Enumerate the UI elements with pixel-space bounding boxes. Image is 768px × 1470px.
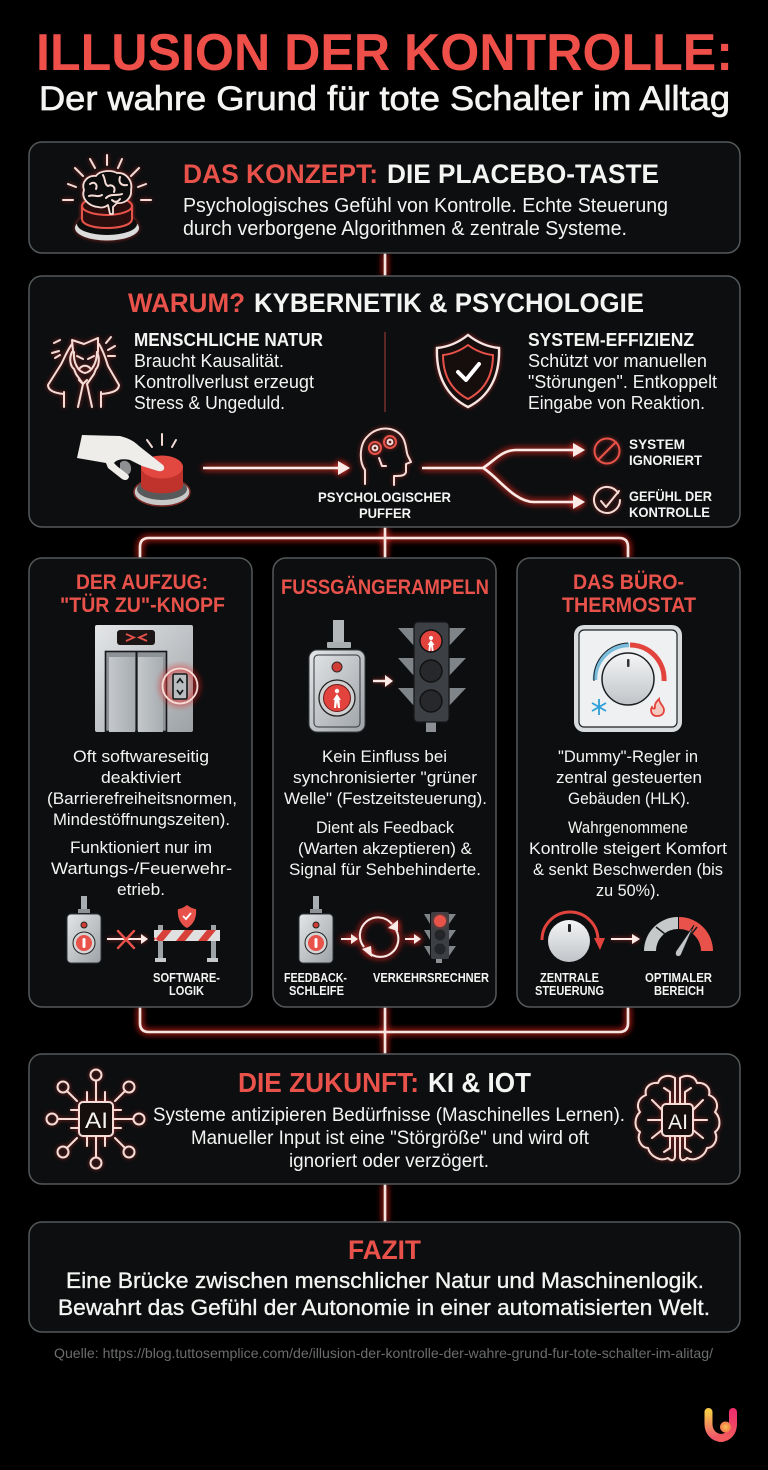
text: conclusion: Bewahrt das Gefühl der Autonomie in einer automatisierten Welt.	[58, 1295, 710, 1320]
text: future	[153, 1105, 625, 1172]
text: thermostat: Gebäuden (HLK).	[568, 789, 690, 808]
text: system efficiency: SYSTEM-EFFIZIENZ	[528, 330, 694, 350]
label: software logic: SOFTWARE-	[153, 971, 220, 985]
panel: concept	[29, 142, 740, 253]
title: Der wahre Grund für tote Schalter im Alltag	[39, 80, 730, 118]
text: human nature	[134, 330, 323, 413]
text: thermostat: zentral gesteuerten	[556, 768, 702, 787]
text: elevator	[47, 747, 237, 899]
icon: AI chip network	[46, 1070, 144, 1168]
icon: barrier with shield	[154, 905, 220, 962]
icon: mini traffic light	[424, 912, 456, 963]
icon: brain on button	[63, 155, 151, 240]
text: pedestrian lights	[284, 747, 487, 879]
text: thermostat: Wahrgenommene	[568, 818, 688, 837]
text: elevator: Wartungs-/Feuerwehr-	[51, 859, 232, 878]
icon: traffic light	[398, 622, 466, 732]
icon: gauge	[644, 917, 713, 956]
text: human nature: Kontrollverlust erzeugt	[134, 372, 314, 392]
title: ILLUSION DER KONTROLLE:	[36, 24, 733, 82]
arrow: button to light	[373, 675, 393, 687]
heading: conclusion: FAZIT	[348, 1235, 421, 1265]
label: optimal range: OPTIMALER	[645, 971, 712, 985]
arrow: blocked	[107, 931, 148, 948]
text: future: Systeme antizipieren Bedürfnisse (Maschinelles Lernen).	[153, 1105, 625, 1126]
heading: concept	[183, 159, 659, 189]
label: feeling of control: GEFÜHL DER	[629, 488, 712, 504]
icon: stressed person	[48, 337, 119, 407]
label: system ignores: SYSTEM	[629, 436, 685, 452]
heading: thermostat: THERMOSTAT	[562, 594, 696, 617]
icon: mini push button	[299, 896, 333, 963]
icon: check circle	[594, 487, 620, 513]
icon: thermostat dial	[574, 625, 682, 732]
panel: future	[29, 1054, 740, 1184]
connectors	[140, 254, 628, 1222]
label: feeling of control: KONTROLLE	[629, 504, 710, 520]
text: thermostat	[529, 747, 727, 900]
heading: concept: DIE PLACEBO-TASTE	[387, 159, 659, 189]
panel: elevator	[29, 558, 252, 1007]
logo	[708, 1412, 733, 1438]
text: thermostat: & senkt Beschwerden (bis	[533, 860, 723, 879]
panel: why	[29, 276, 740, 527]
icon: AI brain	[636, 1076, 720, 1160]
text: pedestrian lights: Dient als Feedback	[316, 818, 454, 837]
label: feedback loop: SCHLEIFE	[289, 984, 344, 998]
icon: head with gears	[361, 429, 411, 485]
icon: shield	[437, 335, 499, 407]
text: thermostat: Kontrolle steigert Komfort	[529, 839, 727, 858]
panel: thermostat	[517, 558, 740, 1007]
text: thermostat: "Dummy"-Regler in	[558, 747, 698, 766]
icon: pedestrian push button	[309, 620, 365, 732]
label: software logic: LOGIK	[169, 984, 204, 998]
text: concept: durch verborgene Algorithmen & zentrale Systeme.	[183, 218, 627, 240]
label: central control	[535, 971, 604, 998]
source: Quelle: https://blog.tuttosemplice.com/de/illusion-der-kontrolle-der-wahre-grund-fur-tote-schalter-im-alitag/	[54, 1345, 713, 1361]
icon: feedback cycle with arrows	[341, 917, 421, 957]
label: optimal range: BEREICH	[654, 984, 704, 998]
text: human nature: Stress & Ungeduld.	[134, 393, 285, 413]
text: elevator: Oft softwareseitig	[73, 747, 209, 766]
text: future: Manueller Input ist eine "Störgröße" und wird oft	[191, 1128, 590, 1149]
icon: AI chip network: AI	[85, 1108, 108, 1133]
text: pedestrian lights: Kein Einfluss bei	[322, 747, 447, 766]
text: pedestrian lights: synchronisierter "grüner	[293, 768, 477, 787]
label: central control: STEUERUNG	[535, 984, 604, 998]
label: software logic	[153, 971, 220, 998]
text: concept: Psychologisches Gefühl von Kontrolle. Echte Steuerung	[183, 195, 668, 217]
heading: thermostat	[562, 571, 696, 617]
text: thermostat: zu 50%).	[596, 881, 660, 900]
label: psychological buffer: PSYCHOLOGISCHER	[318, 489, 451, 505]
heading: future: KI & IOT	[428, 1067, 531, 1098]
label: feedback loop	[284, 971, 347, 998]
arrow: knob to gauge	[611, 934, 640, 944]
text: elevator: Funktioniert nur im	[70, 838, 212, 857]
text: elevator: deaktiviert	[101, 768, 181, 787]
text: system efficiency: "Störungen". Entkoppelt	[528, 372, 717, 392]
heading: elevator: "TÜR ZU"-KNOPF	[60, 594, 225, 617]
icon: hand pressing red button	[77, 434, 190, 506]
text: system efficiency: Eingabe von Reaktion.	[528, 393, 705, 413]
title	[36, 24, 733, 118]
label: psychological buffer	[318, 489, 451, 521]
text: pedestrian lights: (Warten akzeptieren) &	[298, 839, 473, 858]
icon: central control knob	[542, 912, 605, 962]
label: system ignores	[629, 436, 702, 468]
heading: elevator	[60, 571, 225, 617]
label: psychological buffer: PUFFER	[359, 505, 411, 521]
panel: conclusion	[29, 1222, 740, 1332]
panel: pedestrian lights	[273, 558, 496, 1007]
label: optimal range	[645, 971, 712, 998]
label: system ignores: IGNORIERT	[629, 452, 702, 468]
heading: pedestrian lights: FUSSGÄNGERAMPELN	[281, 576, 489, 599]
heading: elevator: DER AUFZUG:	[76, 571, 208, 594]
text: conclusion: Eine Brücke zwischen menschlicher Natur und Maschinenlogik.	[66, 1268, 704, 1293]
text: elevator: (Barrierefreiheitsnormen,	[47, 789, 237, 808]
heading: why: KYBERNETIK & PSYCHOLOGIE	[254, 288, 644, 318]
text: system efficiency: Schützt vor manuellen	[528, 351, 707, 371]
label: traffic computer: VERKEHRSRECHNER	[373, 971, 489, 985]
text: human nature: MENSCHLICHE NATUR	[134, 330, 323, 350]
arrow: fork	[422, 443, 585, 509]
icon: prohibited	[594, 438, 620, 464]
label: feedback loop: FEEDBACK-	[284, 971, 347, 985]
text: pedestrian lights: Signal für Sehbehinderte.	[289, 860, 481, 879]
icon: mini push button	[67, 896, 101, 963]
label: central control: ZENTRALE	[540, 971, 599, 985]
arrow: button to buffer	[203, 461, 350, 475]
heading: future	[238, 1067, 531, 1098]
text: conclusion	[58, 1268, 710, 1320]
heading: thermostat: DAS BÜRO-	[573, 571, 684, 594]
label: feeling of control	[629, 488, 712, 520]
text: elevator: Mindestöffnungszeiten).	[53, 810, 230, 829]
text: elevator: etrieb.	[117, 880, 165, 899]
heading: future: DIE ZUKUNFT:	[238, 1067, 419, 1098]
text: human nature: Braucht Kausalität.	[134, 351, 284, 371]
text: future: ignoriert oder verzögert.	[289, 1151, 489, 1172]
heading: why: WARUM?	[128, 288, 245, 318]
icon: AI brain: AI	[668, 1111, 688, 1134]
text: concept	[183, 195, 668, 240]
text: system efficiency	[528, 330, 717, 413]
heading: concept: DAS KONZEPT:	[183, 159, 378, 189]
icon: elevator	[95, 625, 198, 732]
text: pedestrian lights: Welle" (Festzeitsteuerung).	[284, 789, 487, 808]
